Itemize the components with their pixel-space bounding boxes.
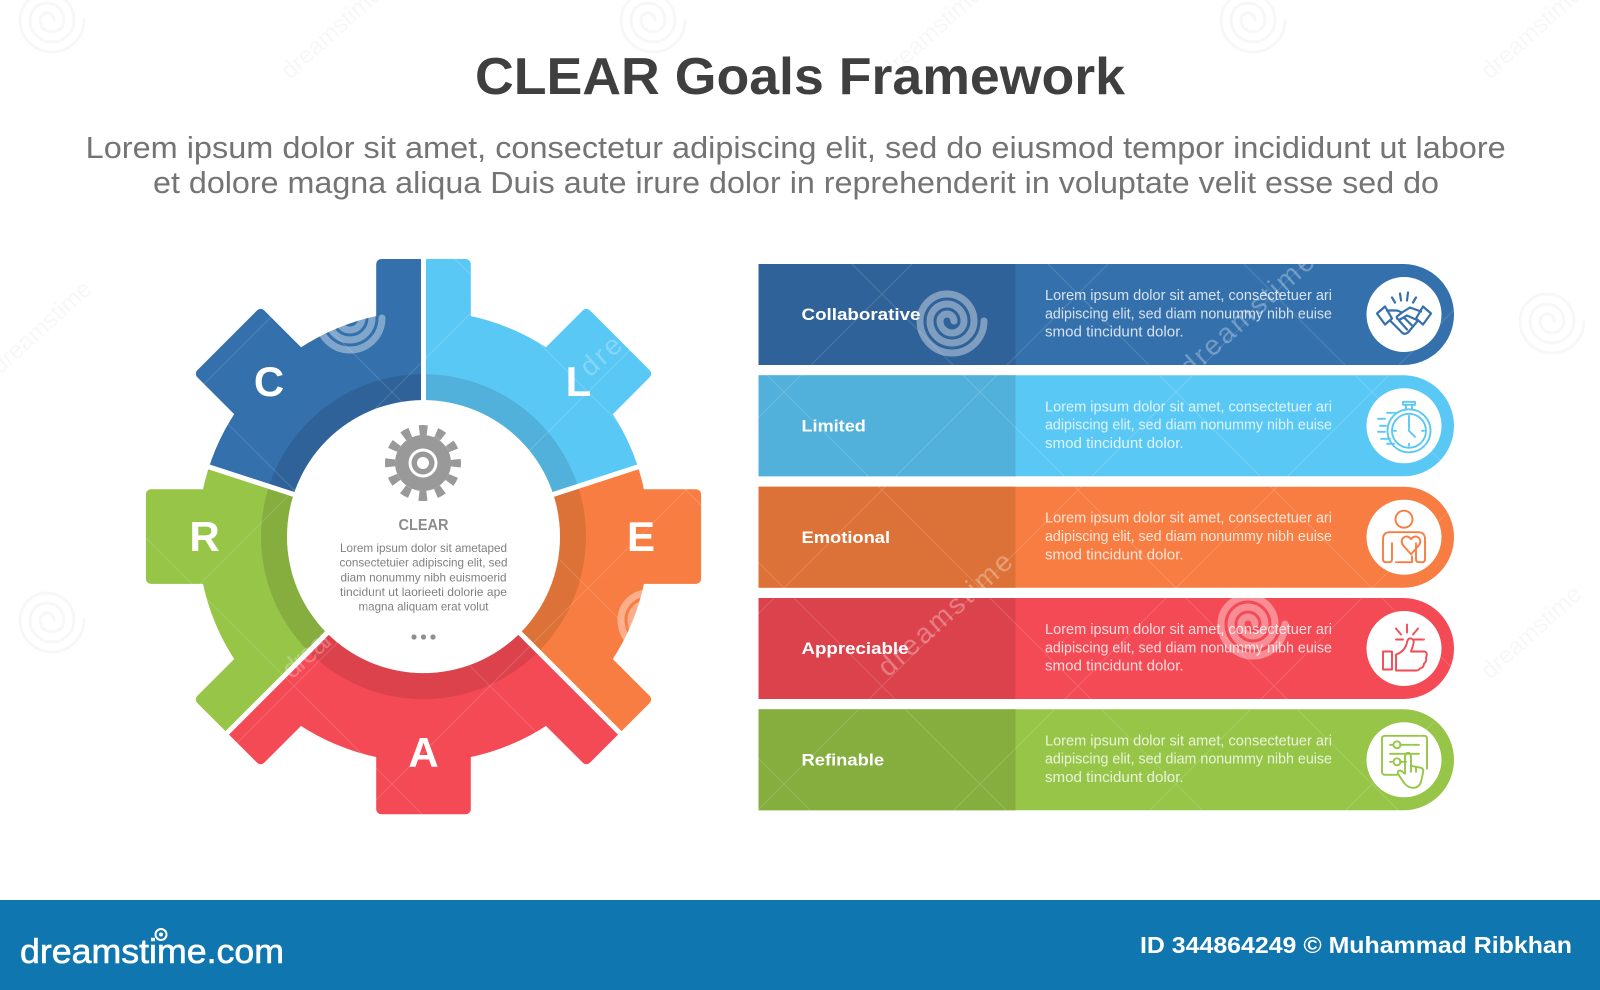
label: Emotional: Emotional xyxy=(802,528,890,547)
icon: person with heart xyxy=(1366,500,1442,575)
description: Collaborative: adipiscing elit, sed diam nonummy nibh euise xyxy=(1045,306,1332,322)
title: CLEAR Goals Framework xyxy=(475,48,1125,106)
gear segment: R xyxy=(146,469,326,731)
watermark overlay on coloured shapes xyxy=(0,220,1500,830)
description: Limited: Lorem ipsum dolor sit amet, consectetuer ari xyxy=(1045,399,1332,415)
description: Limited: smod tincidunt dolor. xyxy=(1045,436,1184,452)
centre text: consectetuier adipiscing elit, sed xyxy=(340,556,508,570)
icon: stopwatch xyxy=(1366,388,1442,463)
description: Refinable: Lorem ipsum dolor sit amet, consectetuer ari xyxy=(1045,733,1332,749)
description: Emotional: smod tincidunt dolor. xyxy=(1045,547,1184,563)
centre text: magna aliquam erat volut xyxy=(358,600,489,614)
letter E: E xyxy=(627,513,655,560)
description: Collaborative xyxy=(1045,288,1332,341)
description: Refinable xyxy=(1045,733,1332,786)
letter L: L xyxy=(566,358,591,405)
watermark overlay on coloured shapes: dreamstime xyxy=(275,574,393,684)
label: Appreciable: Appreciable xyxy=(802,639,908,658)
description: Appreciable: smod tincidunt dolor. xyxy=(1045,659,1184,675)
label: Limited: Limited xyxy=(802,416,866,435)
letter A: A xyxy=(408,729,439,776)
bar: Collaborative xyxy=(758,264,1454,365)
description: Emotional: Lorem ipsum dolor sit amet, consectetuer ari xyxy=(1045,511,1332,527)
faint watermark on white background: dreamstime xyxy=(1476,581,1587,684)
letter C: C xyxy=(254,358,284,405)
icon: handshake xyxy=(1366,277,1442,352)
icon: thumbs up xyxy=(1366,611,1442,686)
subtitle text xyxy=(86,130,1506,200)
gear segment: E xyxy=(522,469,702,731)
description: Collaborative: smod tincidunt dolor. xyxy=(1045,325,1184,341)
ellipsis dots xyxy=(411,634,436,640)
centre text: Lorem ipsum dolor sit ametaped xyxy=(340,541,507,555)
label: Collaborative: Collaborative xyxy=(802,305,920,324)
centre text: diam nonummy nibh euismoerid xyxy=(340,570,506,584)
bar: Limited xyxy=(758,375,1454,476)
description: Appreciable: adipiscing elit, sed diam nonummy nibh euise xyxy=(1045,640,1332,656)
bar: Refinable xyxy=(758,709,1454,810)
watermark overlay on coloured shapes: dreamstime xyxy=(1173,246,1320,382)
centre text xyxy=(340,541,508,614)
description: Appreciable: Lorem ipsum dolor sit amet, consectetuer ari xyxy=(1045,622,1332,638)
description: Emotional: adipiscing elit, sed diam nonummy nibh euise xyxy=(1045,529,1332,545)
centre heading: CLEAR xyxy=(398,517,449,534)
centre circle xyxy=(287,400,560,673)
gear segment: C xyxy=(196,259,421,492)
bar: Emotional xyxy=(758,487,1454,588)
gear segment: L xyxy=(426,259,652,492)
watermark overlay on coloured shapes: dreamstime xyxy=(573,246,720,382)
footer logo: dreamstime.com xyxy=(20,933,284,971)
description: Refinable: adipiscing elit, sed diam nonummy nibh euise xyxy=(1045,752,1332,768)
centre text: tincidunt ut laorieeti dolorie ape xyxy=(340,585,507,599)
subtitle text: et dolore magna aliqua Duis aute irure dolor in reprehenderit in voluptate velit esse sed do xyxy=(153,165,1439,200)
footer band xyxy=(0,900,1600,990)
icon: gear xyxy=(390,430,456,496)
letter R: R xyxy=(189,513,220,560)
label: Refinable: Refinable xyxy=(802,750,884,769)
footer credit: ID 344864249 © Muhammad Ribkhan xyxy=(1140,932,1572,958)
gear diagram xyxy=(104,240,744,857)
description: Limited xyxy=(1045,399,1332,452)
faint watermark on white background xyxy=(0,0,1587,684)
gear segment: A xyxy=(229,634,618,814)
segment separators xyxy=(104,240,744,857)
subtitle text: Lorem ipsum dolor sit amet, consectetur adipiscing elit, sed do eiusmod tempor incididunt ut labore xyxy=(86,130,1506,165)
description: Refinable: smod tincidunt dolor. xyxy=(1045,770,1184,786)
description: Limited: adipiscing elit, sed diam nonummy nibh euise xyxy=(1045,418,1332,434)
description: Emotional xyxy=(1045,511,1332,563)
description: Collaborative: Lorem ipsum dolor sit amet, consectetuer ari xyxy=(1045,288,1332,304)
icon: touch sliders xyxy=(1366,722,1442,797)
watermark overlay on coloured shapes: dreamstime xyxy=(871,546,1018,682)
description: Appreciable xyxy=(1045,622,1332,675)
bar: Appreciable xyxy=(758,598,1454,699)
